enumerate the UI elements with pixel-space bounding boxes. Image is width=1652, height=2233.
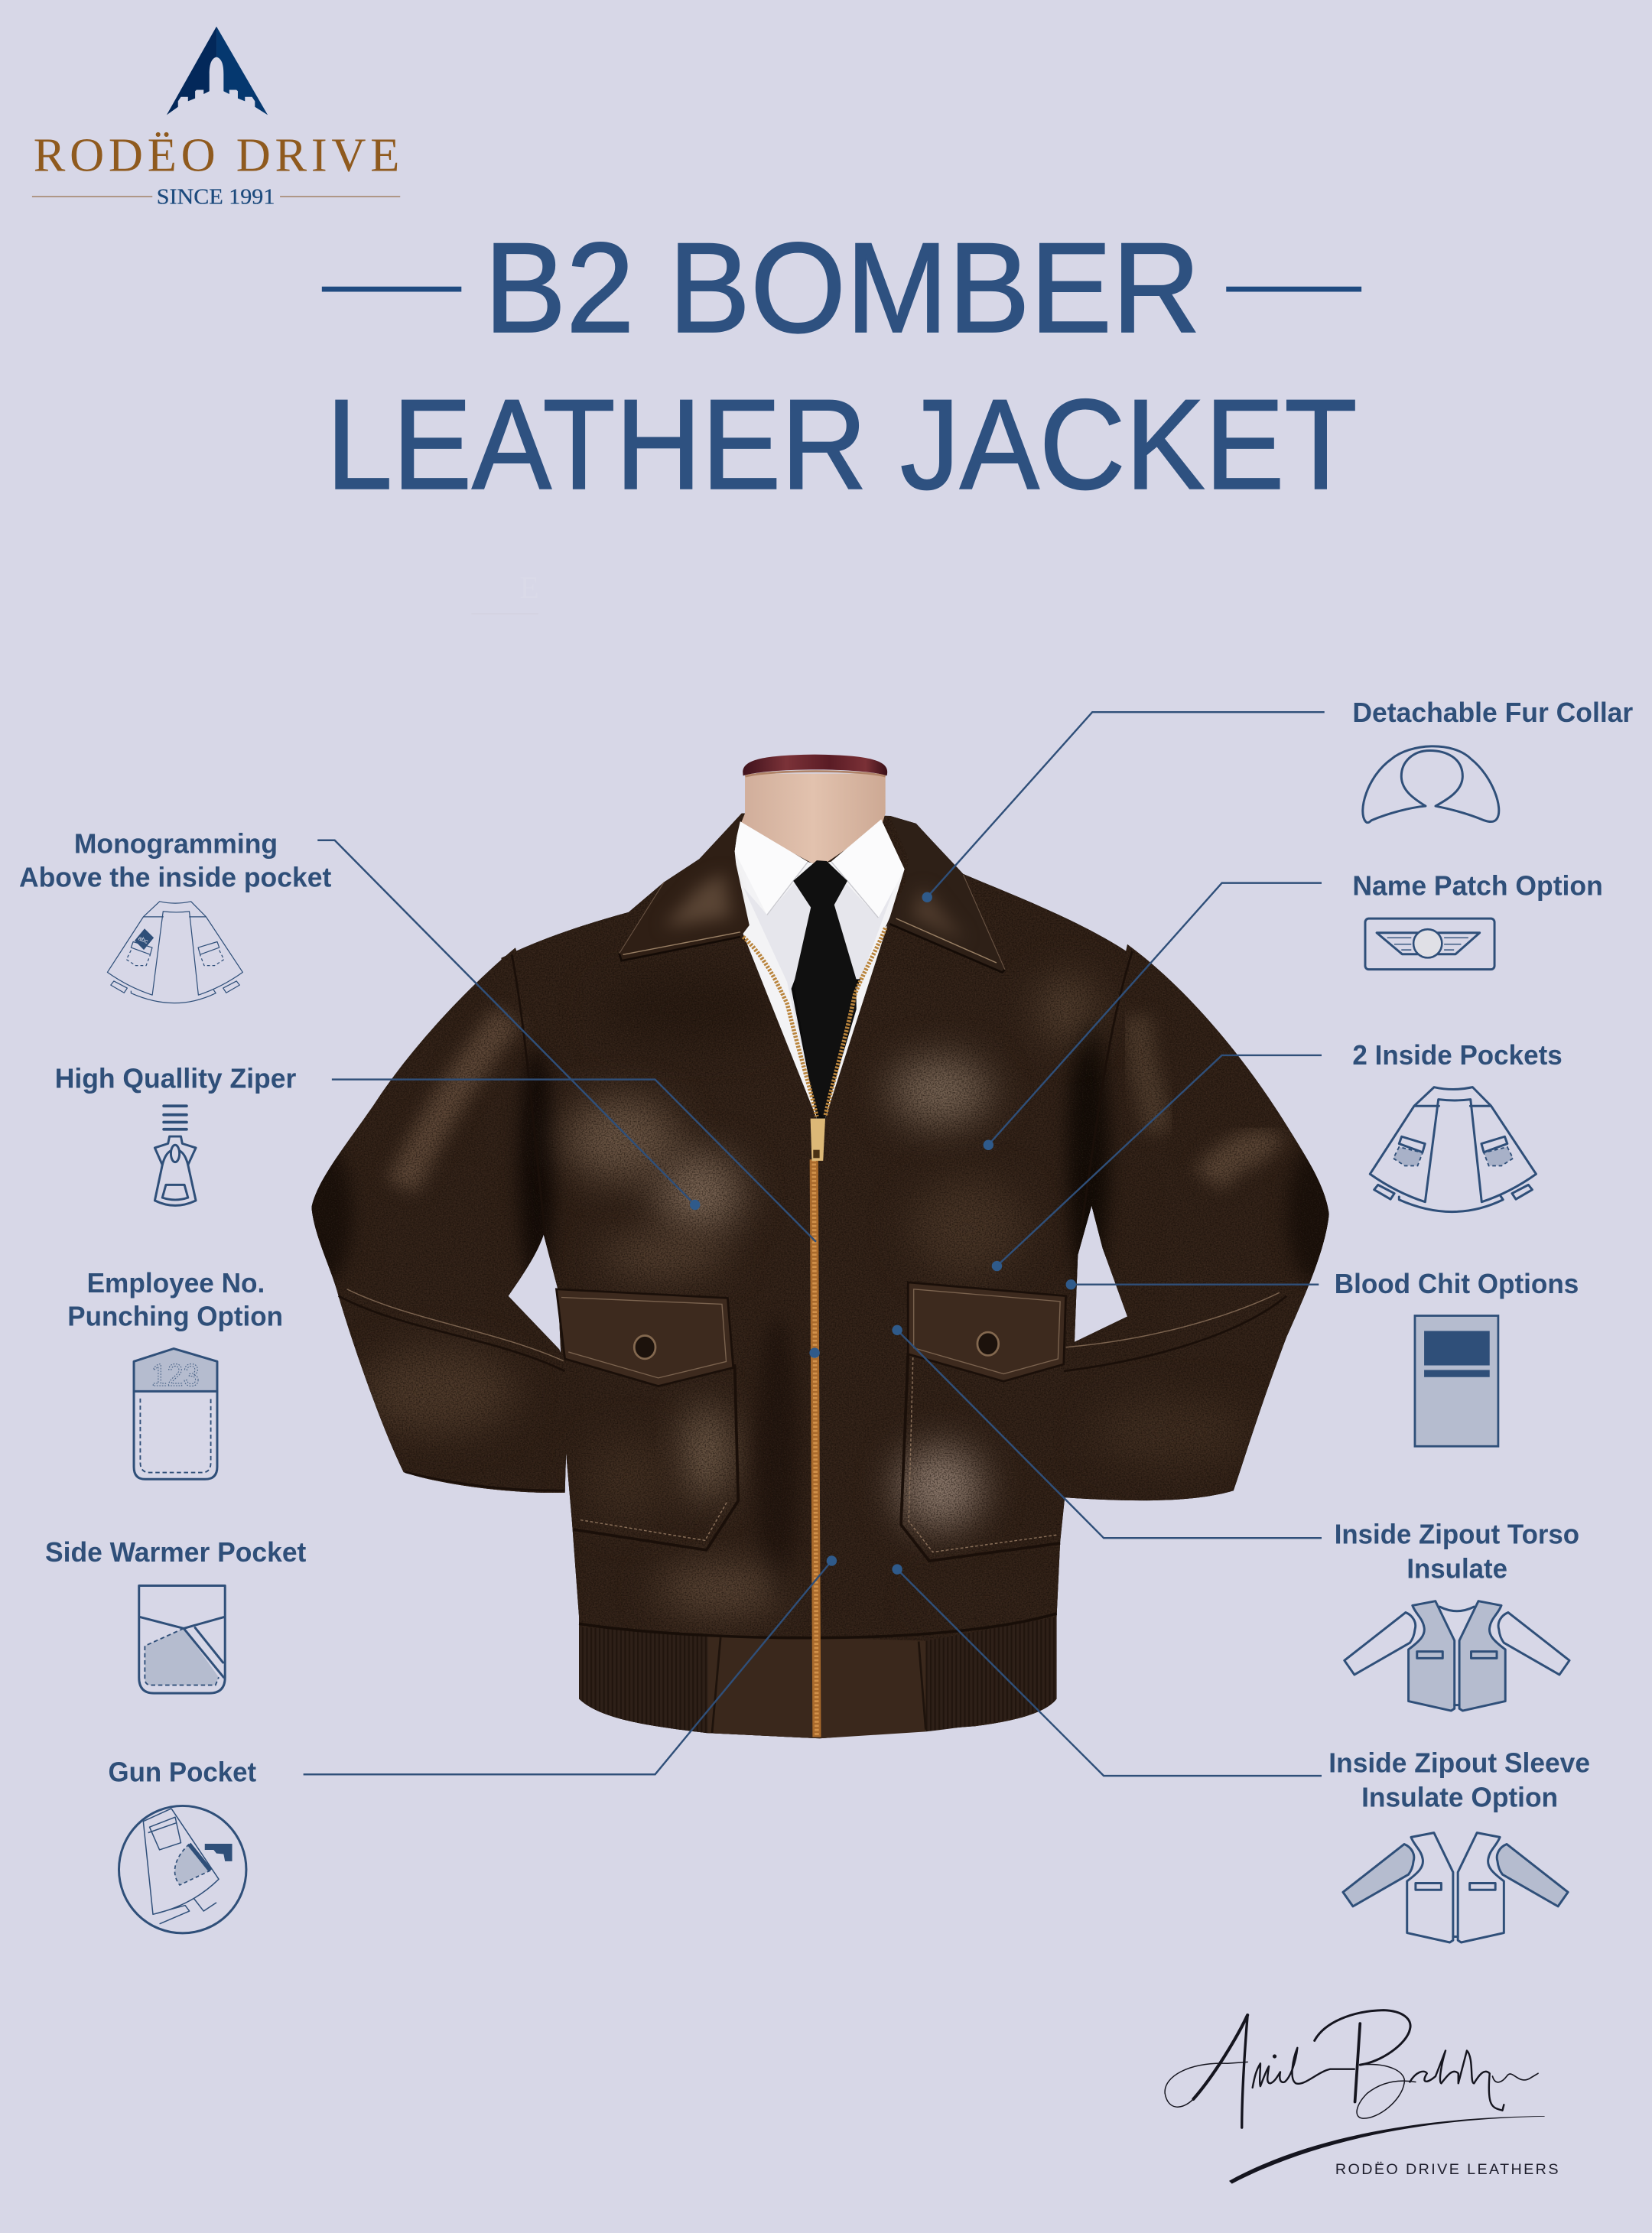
necktie bbox=[793, 860, 857, 1119]
sleeve seams and stitching bbox=[339, 951, 1286, 1490]
panel: right feature callouts bbox=[1328, 697, 1633, 1942]
title rule left bbox=[322, 288, 461, 291]
jacket photo illustration bbox=[311, 754, 1329, 1739]
logo rule right bbox=[280, 196, 400, 197]
title bbox=[322, 216, 1361, 516]
icon: logo arrowhead bbox=[167, 27, 268, 115]
callout: employee number bbox=[67, 1268, 283, 1479]
callout: zipout torso bbox=[1335, 1520, 1579, 1711]
leader: monogramming bbox=[317, 840, 700, 1210]
opening shadow and shirt bbox=[735, 820, 905, 1119]
label: zipper: High Quallity Ziper bbox=[55, 1064, 296, 1094]
label: fur collar: Detachable Fur Collar bbox=[1352, 697, 1633, 728]
label: blood chit: Blood Chit Options bbox=[1335, 1269, 1579, 1299]
label: employee number: Punching Option bbox=[67, 1302, 283, 1332]
label: monogramming bbox=[19, 829, 331, 892]
signature company name: RODËO DRIVE LEATHERS bbox=[1335, 2161, 1558, 2178]
leader: blood chit bbox=[1066, 1279, 1319, 1289]
leader: fur collar bbox=[922, 712, 1325, 902]
label: monogramming: Monogramming bbox=[74, 829, 278, 860]
logo tagline: SINCE 1991 bbox=[157, 184, 275, 209]
label: employee number: Employee No. bbox=[87, 1268, 265, 1299]
label: zipout torso bbox=[1335, 1520, 1579, 1584]
callout: name patch bbox=[1352, 870, 1603, 970]
leader lines bbox=[304, 712, 1325, 1776]
icon: name patch wings bbox=[1365, 918, 1494, 970]
leader: zipout torso bbox=[892, 1325, 1322, 1538]
icon: blood chit bbox=[1415, 1316, 1498, 1446]
front zipper bbox=[743, 928, 886, 1737]
leader: inside pockets bbox=[992, 1055, 1322, 1271]
icon: punched pocket: 123 bbox=[151, 1357, 200, 1393]
leader: zipout sleeve bbox=[892, 1564, 1322, 1776]
label: inside pockets: 2 Inside Pockets bbox=[1352, 1040, 1563, 1071]
icon: side warmer pocket bbox=[139, 1586, 225, 1693]
right pocket bbox=[901, 1282, 1066, 1561]
jacket body silhouette bbox=[311, 814, 1329, 1739]
leader: gun pocket bbox=[304, 1555, 837, 1774]
callout: inside pockets bbox=[1352, 1040, 1563, 1212]
label: side warmer pocket: Side Warmer Pocket bbox=[45, 1537, 306, 1568]
signature underline bbox=[1229, 2116, 1545, 2184]
callout: blood chit bbox=[1335, 1269, 1579, 1446]
leader: name patch bbox=[984, 883, 1322, 1150]
label: zipout torso: Insulate bbox=[1406, 1553, 1507, 1584]
title rule right bbox=[1226, 288, 1361, 291]
callout: zipout sleeve bbox=[1328, 1748, 1590, 1942]
icon: open jacket with pockets bbox=[1370, 1087, 1536, 1212]
label: zipout torso: Inside Zipout Torso bbox=[1335, 1520, 1579, 1550]
callout: side warmer pocket bbox=[45, 1537, 306, 1693]
label: monogramming: Above the inside pocket bbox=[19, 862, 331, 892]
panel: left feature callouts bbox=[19, 829, 331, 1933]
callout: gun pocket bbox=[109, 1757, 256, 1933]
label: employee number bbox=[67, 1268, 283, 1332]
jacket collar bbox=[619, 813, 1006, 973]
icon: fur collar bbox=[1363, 746, 1499, 823]
callout: zipper bbox=[55, 1064, 296, 1205]
label: zipout sleeve: Insulate Option bbox=[1361, 1782, 1558, 1812]
label: zipout sleeve: Inside Zipout Sleeve bbox=[1328, 1748, 1590, 1779]
logo: Rodeo Drive bbox=[32, 27, 400, 209]
icon: sleeve liner bbox=[1343, 1833, 1568, 1942]
leader: zipper bbox=[332, 1080, 820, 1358]
icon: open jacket with monogram: abc bbox=[137, 934, 149, 945]
left pocket bbox=[556, 1289, 738, 1550]
pocket buttons bbox=[634, 1332, 999, 1359]
callout: fur collar bbox=[1352, 697, 1633, 823]
signature: Aniel Bahru bbox=[1165, 2010, 1538, 2127]
ghost mark bbox=[471, 570, 539, 614]
callout: monogramming bbox=[19, 829, 331, 1003]
label: name patch: Name Patch Option bbox=[1352, 870, 1603, 901]
logo wordmark: RODËO DRIVE bbox=[34, 129, 399, 182]
mannequin neck and cap bbox=[740, 755, 887, 867]
logo rule left bbox=[32, 196, 152, 197]
icon: gun pocket bbox=[119, 1806, 246, 1933]
title line two: LEATHER JACKET bbox=[326, 372, 1358, 516]
icon: open jacket with monogram bbox=[107, 902, 242, 1003]
ghost mark: E bbox=[520, 570, 539, 605]
icon: punched pocket bbox=[134, 1349, 217, 1479]
icon: zipper pull bbox=[154, 1106, 196, 1205]
label: gun pocket: Gun Pocket bbox=[109, 1757, 256, 1788]
icon: torso liner bbox=[1345, 1601, 1569, 1711]
title line one: B2 BOMBER bbox=[484, 216, 1201, 359]
label: zipout sleeve bbox=[1328, 1748, 1590, 1812]
signature block bbox=[1165, 2010, 1558, 2184]
rib waistband bbox=[579, 1614, 1057, 1738]
